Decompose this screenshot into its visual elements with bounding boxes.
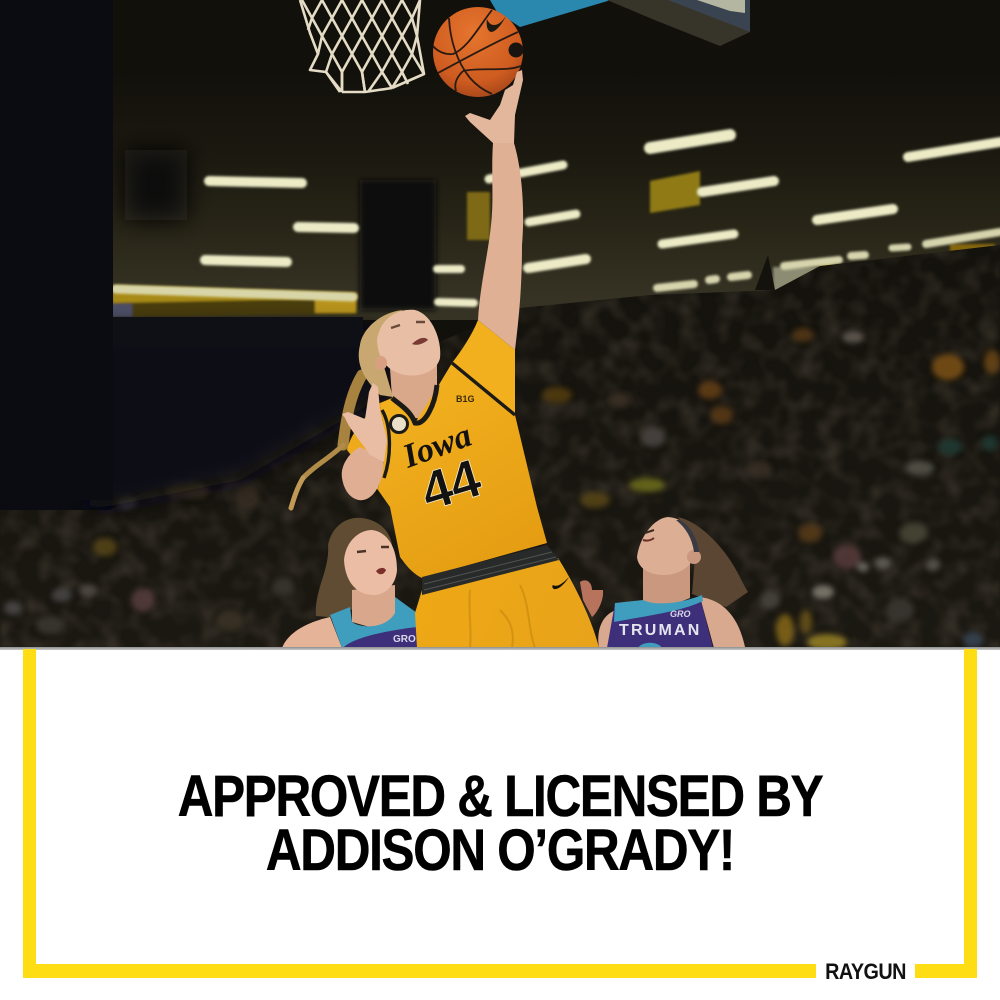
neck — [390, 362, 437, 418]
jersey trim — [382, 363, 515, 478]
player right: Truman defender — [598, 517, 748, 648]
player center: Iowa number 44: B1G — [456, 394, 475, 404]
yellow balcony band — [112, 171, 995, 317]
shorts — [415, 558, 599, 648]
brand name: RAYGUN — [825, 959, 906, 984]
basketball — [433, 7, 524, 97]
shorts swoosh — [552, 577, 569, 589]
hair — [359, 310, 403, 397]
headline: APPROVED & LICENSED BY — [178, 764, 822, 829]
player center: Iowa number 44 — [291, 70, 599, 648]
crowd stands — [0, 0, 1000, 650]
raised arm — [478, 143, 523, 350]
jersey text: Iowa — [397, 417, 476, 476]
arena ceiling and walls — [0, 0, 1000, 648]
yellow frame: left bar — [23, 649, 36, 978]
braid — [291, 375, 362, 508]
player left: Truman defender — [282, 518, 417, 648]
yellow frame: bottom bar right segment — [915, 964, 977, 978]
player left: Truman defender: GRO — [393, 634, 416, 645]
opponent hand — [580, 580, 603, 617]
jersey — [378, 363, 547, 578]
lowered arm — [342, 447, 383, 500]
lowered hand — [342, 383, 387, 462]
photo: basketball layup in arena — [0, 0, 1000, 647]
waistband — [422, 545, 559, 595]
yellow frame: bottom bar left segment — [23, 964, 816, 978]
headline: ADDISON O’GRADY! — [266, 818, 734, 883]
backboard — [490, 0, 750, 46]
sleeve raised — [452, 320, 515, 415]
sleeve lowered — [347, 403, 386, 490]
player center: Iowa number 44: 44 — [414, 448, 488, 522]
player right: Truman defender: GRO — [670, 609, 691, 619]
yellow frame: right bar — [964, 649, 977, 978]
player right: Truman defender: TRUMAN — [619, 622, 702, 639]
face — [377, 310, 440, 376]
basketball hoop net — [300, 0, 424, 92]
headline — [178, 764, 824, 883]
shaded wall below balcony — [90, 330, 385, 510]
photo bottom shadow — [0, 647, 1000, 650]
raised hand — [465, 70, 523, 143]
jersey patch — [390, 416, 408, 432]
arena lights — [116, 135, 1000, 303]
